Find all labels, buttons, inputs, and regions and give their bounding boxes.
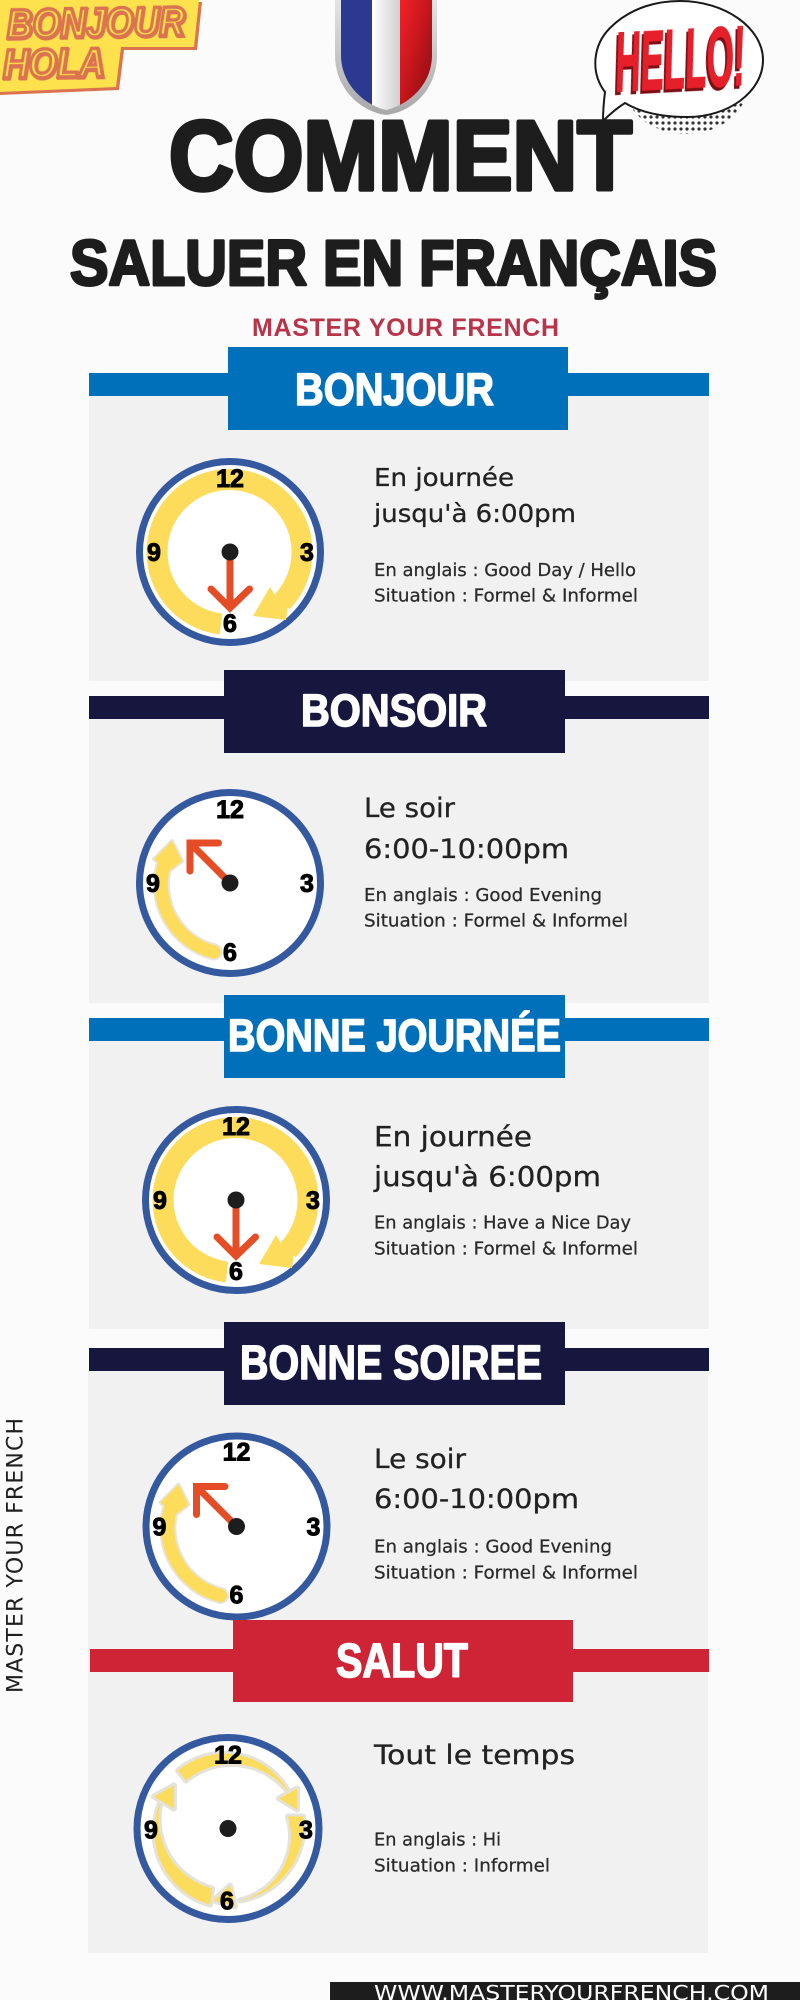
banner: bonne journée xyxy=(89,995,709,1078)
banner: bonjour: BONJOUR xyxy=(295,364,494,415)
text: bonjour details: En anglais : Good Day / Hello xyxy=(374,560,636,581)
clock: bonjour: 12 xyxy=(216,465,244,493)
clock: salut: 6 xyxy=(220,1888,234,1916)
banner: salut: SALUT xyxy=(336,1635,468,1688)
clock: bonne soirée: 6 xyxy=(230,1582,243,1610)
text: bonjour details xyxy=(373,463,638,606)
clock: salut: 12 xyxy=(214,1742,242,1770)
title: comment: COMMENT xyxy=(169,100,632,210)
sticker: bonjour hola: HOLA xyxy=(2,39,105,87)
clock: bonne journée: 3 xyxy=(306,1187,320,1215)
banner: salut xyxy=(90,1620,709,1702)
text: bonne soirée details: Le soir xyxy=(374,1444,467,1475)
panel: bonsoir background xyxy=(89,719,709,1003)
title: saluer en français: SALUER EN FRANÇAIS xyxy=(70,227,717,299)
clock: bonjour: 3 xyxy=(300,539,314,567)
icon: french flag shield xyxy=(335,0,437,115)
clock: bonsoir: 3 xyxy=(300,870,314,898)
text: bonne journée details xyxy=(373,1120,638,1260)
clock: bonjour xyxy=(140,462,320,642)
text: bonsoir details: Situation : Formel & Informel xyxy=(364,910,628,932)
clock: bonne soirée: 9 xyxy=(153,1514,166,1542)
text: bonne journée details: En anglais : Have a Nice Day xyxy=(374,1212,631,1234)
clock: bonne soirée: 12 xyxy=(223,1438,250,1466)
clock: salut xyxy=(137,1738,319,1920)
text: salut details: Tout le temps xyxy=(373,1740,575,1771)
clock: bonsoir: 6 xyxy=(223,939,237,967)
clock: salut: 3 xyxy=(299,1816,313,1844)
panel: bonjour background xyxy=(89,396,709,681)
text: bonsoir details: 6:00-10:00pm xyxy=(364,834,569,865)
clock: bonne journée: 9 xyxy=(153,1187,167,1215)
clock: bonjour: 6 xyxy=(223,610,237,638)
clock: bonne soirée xyxy=(146,1436,327,1617)
text: bonjour details: jusqu'à 6:00pm xyxy=(373,499,576,528)
text: bonne journée details: En journée xyxy=(374,1120,532,1153)
panel: bonne journée background xyxy=(89,1041,709,1329)
clock: salut: 9 xyxy=(144,1816,158,1844)
text: salut details: En anglais : Hi xyxy=(374,1830,501,1850)
banner: bonne journée: BONNE JOURNÉE xyxy=(228,1010,561,1061)
text: bonne soirée details xyxy=(374,1444,638,1584)
clock: bonne journée: 6 xyxy=(229,1258,243,1286)
banner: bonsoir: BONSOIR xyxy=(301,685,487,736)
text: bonsoir details xyxy=(364,793,628,932)
text: bonjour details: Situation : Formel & Informel xyxy=(374,586,638,606)
icon: hello speech bubble xyxy=(595,1,763,134)
banner: bonjour xyxy=(89,347,709,430)
text: salut details: Situation : Informel xyxy=(374,1856,550,1876)
text: bonsoir details: Le soir xyxy=(364,793,456,824)
text: bonsoir details: En anglais : Good Evening xyxy=(364,885,602,906)
text: bonne soirée details: Situation : Formel & Informel xyxy=(374,1562,638,1584)
clock: bonjour: 9 xyxy=(147,539,161,567)
clock: bonsoir xyxy=(140,792,320,974)
clock: bonsoir: 9 xyxy=(146,870,160,898)
text: bonne journée details: jusqu'à 6:00pm xyxy=(373,1160,601,1193)
clock: bonsoir: 12 xyxy=(216,796,244,824)
text: bonne soirée details: 6:00-10:00pm xyxy=(374,1484,579,1515)
text: bonne soirée details: En anglais : Good Evening xyxy=(374,1536,612,1558)
text: bonjour details: En journée xyxy=(374,463,514,492)
banner: bonsoir xyxy=(89,670,709,753)
side label: master your french: MASTER YOUR FRENCH xyxy=(4,1418,28,1693)
text: bonne journée details: Situation : Formel & Informel xyxy=(374,1238,638,1260)
clock: bonne journée xyxy=(146,1110,326,1290)
clock: bonne soirée: 3 xyxy=(307,1514,320,1542)
banner: bonne soirée: BONNE SOIREE xyxy=(240,1337,542,1390)
sticker: bonjour hola xyxy=(0,0,202,95)
clock: bonne journée: 12 xyxy=(222,1113,250,1141)
subtitle: master your french: MASTER YOUR FRENCH xyxy=(252,314,559,342)
panel: bonne soirée and salut background xyxy=(88,1371,708,1953)
text: salut details xyxy=(373,1740,575,1876)
banner: bonne soirée xyxy=(89,1322,709,1405)
